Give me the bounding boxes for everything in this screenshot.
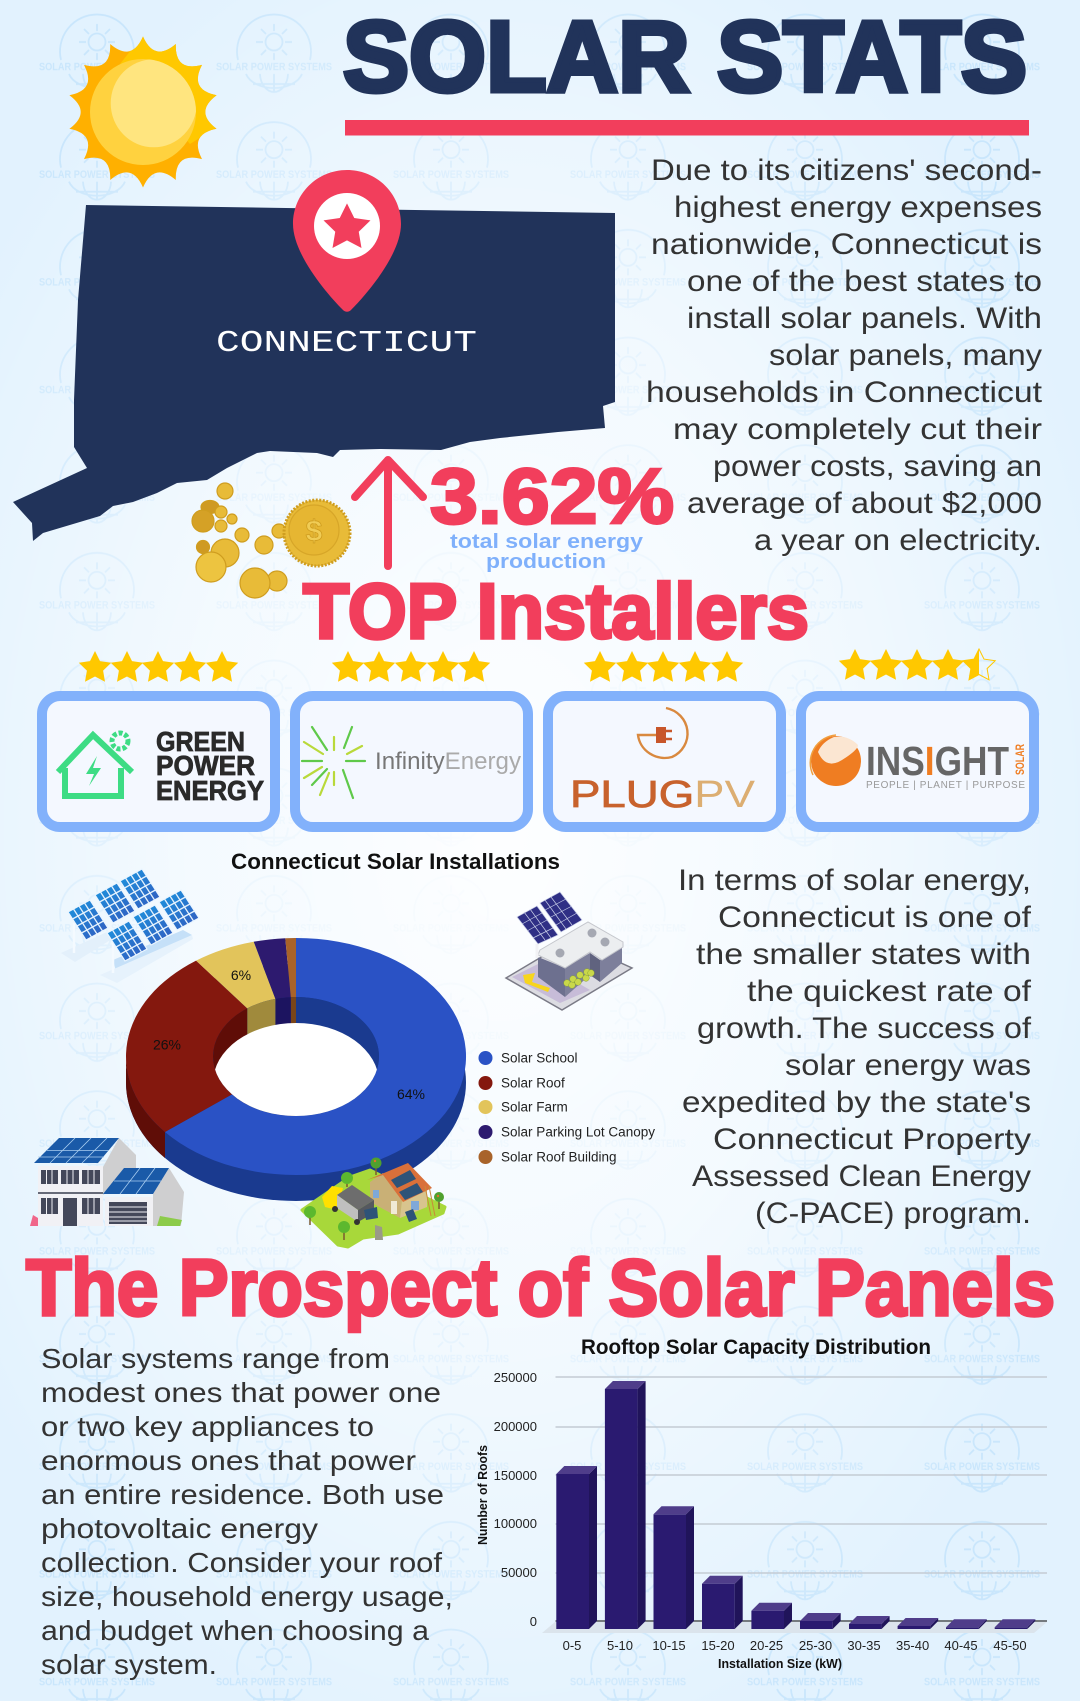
text block: growth: the quickest rate of [747,975,1032,1008]
text block: intro: households in Connecticut [646,376,1043,409]
text block: growth: In terms of solar energy, [678,864,1031,897]
slice: parking canopy [254,938,291,999]
text block: intro: a year on electricity. [754,524,1042,557]
text block: growth: (C-PACE) program. [755,1197,1031,1230]
y axis labels [494,1370,537,1629]
x axis labels: 5-10 [607,1638,633,1653]
y axis labels: 50000 [501,1565,537,1580]
text block: systems: collection. Consider your roof [41,1547,442,1578]
chart legend: Solar Parking Lot Canopy [501,1124,655,1140]
x axis labels: 45-50 [993,1638,1027,1653]
value labels: 6% [231,967,251,983]
chart extrusion [126,964,466,1201]
stat label: total solar energy [450,531,644,553]
text block: intro: nationwide, Connecticut is [651,228,1042,261]
text block: intro: average of about $2,000 [687,487,1042,520]
chart legend: Solar Farm [501,1100,568,1114]
slice: solar farm 6% [196,942,275,1008]
x axis labels: 15-20 [701,1638,735,1653]
star rating 3 [584,651,743,682]
text block: growth: the smaller states with [696,938,1031,971]
text block: intro: Due to its citizens' second- [651,154,1042,187]
text block: systems: solar system. [41,1649,217,1680]
card: PlugPV [548,696,781,827]
stat label: production [486,551,606,573]
y axis labels: 250000 [494,1370,537,1385]
card: Infinity Energy [295,696,528,827]
logo icon: orange sun [810,735,861,786]
x axis labels: 10-15 [652,1638,686,1653]
trees [304,1158,444,1240]
logo text: GREEN [156,726,245,757]
title underline [345,120,1029,136]
card: Green Power Energy [42,696,275,827]
slice: solar roof 26% [126,961,247,1132]
x axis title: Installation Size (kW) [718,1657,842,1671]
text block: growth: Assessed Clean Energy [692,1160,1031,1193]
bar chart: rooftop capacity [476,1336,1047,1671]
stat: 3.62%: 3.62% [430,452,674,540]
chart legend: Solar Roof Building [501,1150,617,1164]
x axis labels: 35-40 [896,1638,929,1653]
icon: house with solar roof [30,1138,184,1226]
x axis labels: 25-30 [799,1638,832,1653]
logo text [156,726,264,806]
title: SOLAR STATS [343,1,1027,113]
text block: intro: install solar panels. With [687,302,1042,335]
donut hole [213,997,379,1116]
state shape [13,205,615,541]
text block: growth [678,864,1032,1230]
x axis labels: 20-25 [750,1638,783,1653]
text block: systems [41,1343,453,1680]
icon: school building with solar panels [506,892,632,1010]
y axis labels: 100000 [494,1516,537,1531]
card: Insight Solar [801,696,1034,827]
icon: house installation scene [302,1158,445,1247]
icon: location pin [293,170,401,312]
star rating 1 [79,651,238,682]
y axis labels: 200000 [494,1419,537,1434]
y axis labels: 0 [530,1614,537,1629]
chart title: installations: Connecticut Solar Installations [231,849,560,874]
logo text: POWER [156,750,255,781]
logo text: PLUG PV [570,774,756,816]
logo tagline: PEOPLE | PLANET | PURPOSE [866,780,1025,791]
floor and grid [542,1377,1047,1633]
text block: systems: or two key appliances to [41,1411,374,1442]
text block: systems: Solar systems range from [41,1343,390,1374]
chart title: Rooftop Solar Capacity Distribution [581,1336,931,1359]
text block: systems: photovoltaic energy [41,1513,318,1544]
x axis labels: 30-35 [847,1638,881,1653]
text block: systems: modest ones that power one [41,1377,441,1408]
donut chart [126,938,466,1201]
text block: intro: one of the best states to [687,265,1042,298]
x axis labels [563,1638,1027,1653]
text block: growth: growth. The success of [697,1012,1032,1045]
star rating 4 [839,649,995,680]
text block: systems: and budget when choosing a [41,1615,429,1646]
logo text: ENERGY [156,775,264,806]
slice: solar school 64% [165,938,466,1175]
heading: top installers: TOP Installers [303,567,809,655]
icon: gold coins [192,483,350,598]
logo icon: green house [58,733,132,796]
text block: intro [646,154,1043,557]
value labels: 64% [397,1086,425,1102]
text block: systems: an entire residence. Both use [41,1479,444,1510]
value labels [153,967,425,1102]
stat label [450,531,644,573]
logo text: INSIGHT [866,738,1009,784]
logo text: InfinityEnergy [375,748,521,775]
icon: gold coins: $ [306,515,323,548]
text block: systems: size, household energy usage, [41,1581,453,1612]
panel: Connecticut map [13,170,615,541]
y axis labels: 150000 [494,1468,537,1483]
chart legend: Solar School [501,1050,578,1066]
x axis labels: 0-5 [563,1638,581,1653]
state name: CONNECTICUT [216,326,477,361]
icon: solar panels [61,869,199,983]
bars [556,1381,1035,1629]
icon: sun [69,36,217,188]
logo side word: SOLAR [1013,744,1027,775]
arrow: growth up [355,460,423,566]
x axis labels: 40-45 [944,1638,978,1653]
logo icon: plug [638,708,688,758]
text block: growth: Connecticut Property [713,1123,1031,1156]
text block: intro: may completely cut their [673,413,1042,446]
chart legend [478,1050,655,1164]
text block: growth: solar energy was [785,1049,1031,1082]
logo icon: burst [302,727,365,798]
text block: intro: power costs, saving an [713,450,1042,483]
chart legend: Solar Roof [501,1076,565,1090]
truck [322,1185,378,1225]
text block: intro: highest energy expenses [674,191,1042,224]
slice: roof building [285,938,296,997]
text block: growth: expedited by the state's [682,1086,1031,1119]
star rating 2 [332,651,490,682]
y axis title: Number of Roofs [476,1445,490,1545]
text block: intro: solar panels, many [769,339,1042,372]
text block: growth: Connecticut is one of [718,901,1032,934]
value labels: 26% [153,1036,181,1052]
house [367,1163,435,1222]
text block: systems: enormous ones that power [41,1445,416,1476]
